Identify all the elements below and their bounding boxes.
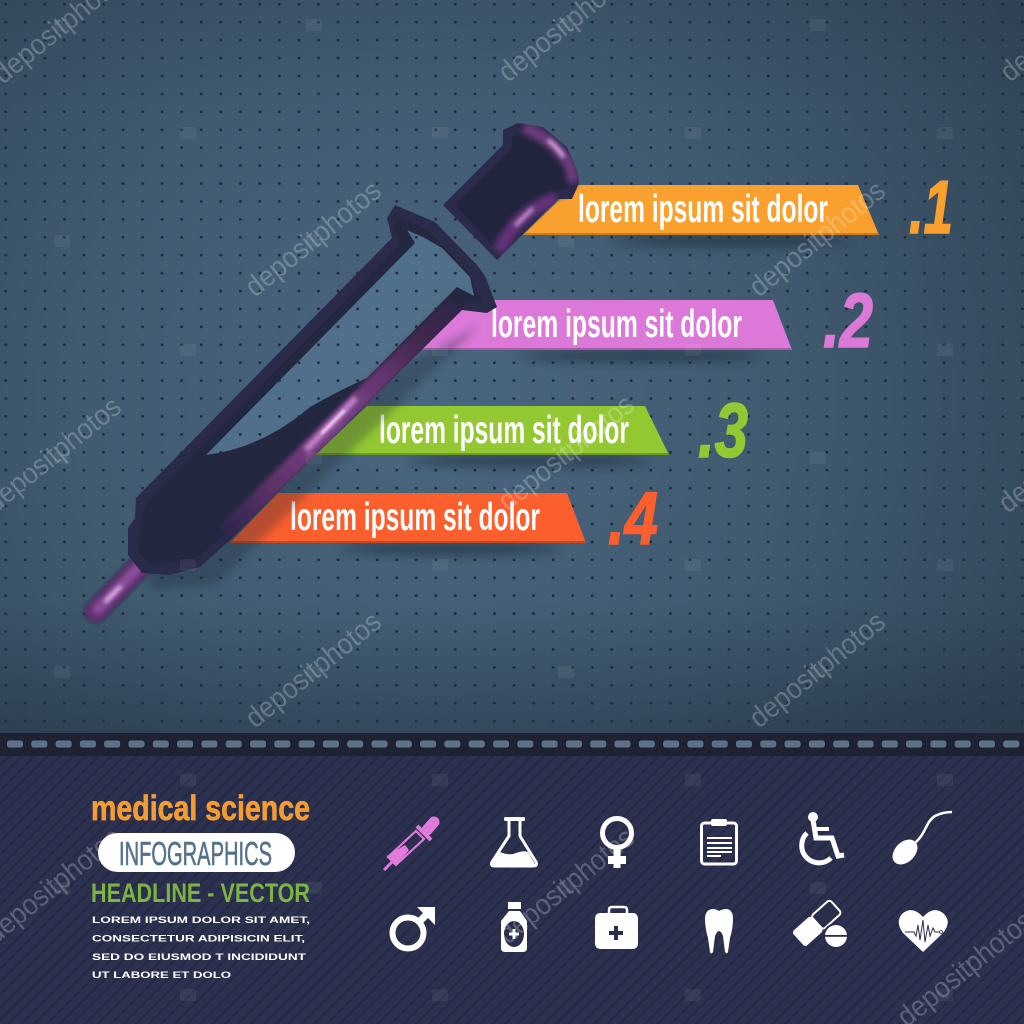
pill: infographics: INFOGRAPHICS [119, 835, 272, 872]
watermark overlay: depositphotos [743, 175, 892, 303]
subheading: headline vector: HEADLINE - VECTOR [91, 878, 310, 908]
icon: heart with pulse [899, 910, 948, 952]
watermark overlay: depositphotos [239, 606, 388, 734]
body text: UT LABORE ET DOLO [92, 970, 231, 981]
icon: wheelchair [802, 812, 844, 863]
ribbon 3: green: lorem ipsum sit dolor [379, 409, 629, 452]
purple liquid edge [224, 304, 456, 534]
ribbon 2: pink [421, 300, 792, 350]
ribbon 3: green [315, 406, 669, 455]
icon: pills [792, 899, 849, 949]
pipette tip [96, 564, 142, 611]
watermark overlay: depositphotos [743, 606, 892, 734]
watermark overlay: depositphotos [239, 175, 388, 303]
icon: medicine bottle [501, 902, 527, 952]
pill: infographics [98, 833, 295, 872]
icon: female symbol [602, 818, 632, 868]
pipette bulb [443, 123, 579, 260]
icon: pipette [384, 822, 434, 870]
ribbon 4: red-orange: lorem ipsum sit dolor [290, 496, 540, 539]
ribbon 1: orange [523, 185, 879, 235]
heading: medical science: medical science [91, 789, 310, 828]
icon: clipboard [702, 819, 736, 864]
number .3: .3 [698, 388, 748, 474]
icon: sperm cell [888, 812, 952, 869]
number .1: .1 [909, 165, 953, 249]
icon: flask [491, 817, 537, 866]
ribbon 1: orange: lorem ipsum sit dolor [578, 188, 828, 231]
icon: tooth [705, 909, 733, 954]
lower panel background [0, 756, 1024, 1024]
icon: male symbol [392, 907, 435, 948]
ribbon shadows [340, 235, 850, 555]
glass window [206, 230, 474, 455]
ribbon 4: red-orange [230, 493, 586, 543]
number .2: .2 [823, 278, 873, 364]
pipette shadow [149, 325, 480, 590]
body text [92, 915, 310, 981]
watermark overlay: depositphotos [492, 389, 641, 517]
body text: LOREM IPSUM DOLOR SIT AMET, [92, 915, 310, 926]
watermark overlay: depositphotos [492, 822, 641, 950]
pipette illustration [96, 123, 579, 611]
body text: SED DO EIUSMOD T INCIDIDUNT [92, 952, 306, 963]
pipette body [128, 205, 497, 575]
number .4: .4 [608, 477, 658, 560]
ribbon 2: pink: lorem ipsum sit dolor [491, 303, 742, 346]
icon: first aid case [595, 907, 638, 949]
background: dotted upper panel [0, 0, 1024, 735]
stitched divider band [0, 733, 1024, 756]
body text: CONSECTETUR ADIPISICIN ELIT, [92, 934, 305, 944]
